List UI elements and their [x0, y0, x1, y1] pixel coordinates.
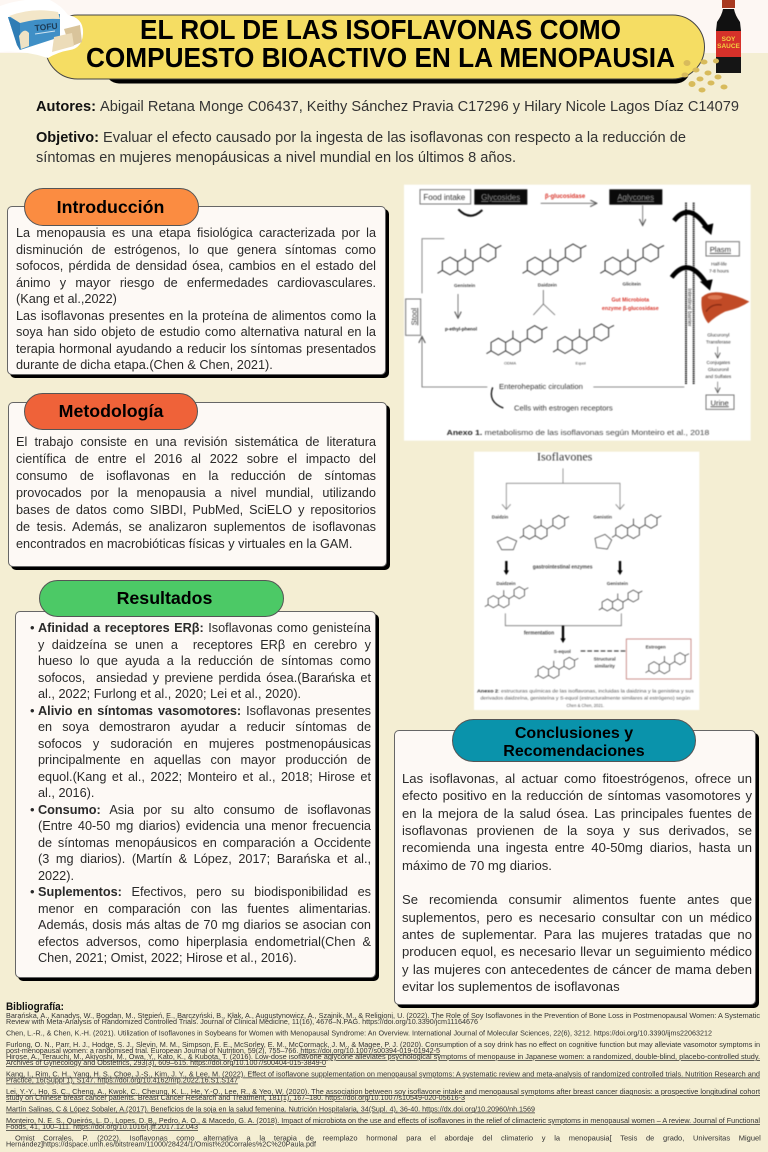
text: metodología: El trabajo consiste en una revisión sistemática de literatura — [16, 434, 376, 448]
molecules: enzyme β-glucosidase — [602, 306, 659, 312]
thick arrows — [672, 212, 713, 291]
reference list: Omist Corrales, P. (2022). Isoflavonas como alternativa a la terapia de reemplazo hormonal para el abordaje del climaterio y la menopausia[ Tesis de grado, Universitas Miguel — [15, 1134, 761, 1142]
top row: food intake and glycosides — [420, 189, 527, 216]
daidzin and genistin — [492, 514, 661, 550]
text: introducción: (Kang et al.,2022) — [16, 292, 117, 306]
authors: Autores: — [36, 98, 96, 115]
icon: soy sauce bottle — [716, 0, 741, 73]
text: conclusiones — [402, 771, 752, 994]
reference list: Kang, I., Rim, C. H., Yang, H. S., Choe, J.-S., Kim, J. Y., & Lee, M. (2022). Effect of isoflavone supplementation on menopausal symptoms: A systematic review and meta-analysis of randomized controlled trials. Nutrition Research and — [6, 1070, 760, 1078]
bibliography — [6, 1001, 761, 1148]
objective: Evaluar el efecto causado por la ingesta de las isoflavonas con respecto a la reducción de — [103, 129, 686, 146]
text: conclusiones: y las mujeres con antecedentes de cáncer de mama deben — [402, 962, 752, 977]
text: resultados list: Consumo: Asia por su alto consumo de isoflavonas — [38, 802, 371, 816]
daidzein and genistein: Genistein — [607, 581, 628, 586]
reference list: post-menopausal women: a randomised trial. European Journal of Nutrition, 59(2), 755–766. https://doi.org/10.1007/s00394-019-01942-5 — [6, 1046, 440, 1055]
text: resultados list: y daidzeína se unen a receptores ERβ en cerebro y — [38, 638, 371, 652]
figure: anexo 2 isoflavones structures — [474, 450, 700, 710]
header: title, decoration, authors and objective — [0, 0, 741, 166]
icon: liver — [701, 292, 749, 323]
reference list: Foods, 41, 100–111. https://doi.org/10.1016/j.jff.2017.12.043 — [6, 1122, 198, 1131]
text: resultados list: (Entre 40-50 mg diarios) evidencia una menor frecuencia — [38, 819, 371, 833]
heading: resultados: Resultados — [117, 588, 212, 608]
objective — [36, 129, 686, 166]
molecules: Equol — [576, 360, 586, 365]
daidzein and genistein — [485, 581, 642, 611]
title banner: COMPUESTO BIOACTIVO EN LA MENOPAUSIA — [86, 42, 675, 73]
liver pathway: and Sulfates — [705, 374, 732, 379]
heading: introducción: Introducción — [57, 196, 164, 216]
text: resultados list: Además, dosis más altas de 70 mg diarios se asocian con — [38, 918, 371, 932]
text: conclusiones: máximo de 70 mg diarios. — [402, 858, 552, 873]
enterohepatic circulation labels: Cells with estrogen receptors — [514, 404, 613, 413]
heading: metodología: Metodología — [59, 401, 163, 421]
panel: resultados — [15, 580, 379, 981]
molecules: ODMA — [504, 360, 516, 365]
text: metodología: encontrados en macrobióticas físicas y virtuales en la GAM. — [16, 537, 352, 551]
reference list: Chen, L.-R., & Chen, K.-H. (2021). Utilization of Isoflavones in Soybeans for Women with Menopausal Syndrome: An Overview. International Journal of Molecular Sciences, 22(6), 3212. https://doi.org/10.3390/ijms22063212 — [6, 1028, 712, 1038]
molecules: Glicitein — [622, 282, 641, 287]
text: conclusiones: producen equol, es necesario llevar un seguimiento médico — [402, 944, 752, 959]
reference list: study on Chinese breast cancer patients. Breast Cancer Research and Treatment, 181(1), 167–180. https://doi.org/10.1007/s10549-020-05616-3 — [6, 1093, 465, 1102]
objective: síntomas en mujeres menopáusicas a nivel mundial en los últimos 8 años. — [36, 149, 516, 166]
text: resultados list: hueso lo que ayuda a la reducción de síntomas como — [38, 654, 371, 668]
diagram heading: Isoflavones — [537, 450, 593, 464]
text: introducción — [16, 226, 376, 372]
aglycones box — [609, 189, 662, 225]
text: resultados list: Chen, 2021; Omist, 2022; Hirose et al., 2016). — [38, 951, 297, 965]
text: resultados list: menor en comparación con las fuentes alimentarias. — [38, 902, 371, 916]
liver pathway: Glucuronyl — [707, 333, 729, 338]
enzymes arrows: gastrointestinal enzymes — [533, 565, 593, 571]
reference list: Furlong, O. N., Parr, H. J., Hodge, S. J., Slevin, M. M., Simpson, E. E., McSorley, E. M., McCormack, J. M., & Magee, P. J. (2020). Consumption of a soy drink has no effect on cognitive function but may alleviate vasomotor symptoms in — [6, 1040, 760, 1049]
caption: anexo 2: Anexo 2 : estructuras químicas de las isoflavonas, incluidas la daidzina y la genistina y sus — [477, 689, 694, 694]
heading: conclusiones y recomendaciones — [452, 719, 696, 762]
plasm box — [706, 242, 739, 273]
text: metodología: provocados por la menopausia a nivel mundial, utilizando — [16, 486, 376, 500]
caption: anexo 2: derivados daidzeína, genisteína y S-equol (estructuralmente similares al estrógeno) según — [480, 696, 691, 701]
reference list: Archives of Gynecology and Obstetrics, 293(3), 609–615. https://doi.org/10.1007/s00404-015-3849-0 — [6, 1058, 326, 1067]
urine box: Urine — [711, 398, 729, 407]
reference list — [6, 1011, 761, 1148]
text: resultados list: de síntomas menopáusicos en comparación a Occidente — [38, 836, 371, 850]
panel: conclusiones y recomendaciones — [394, 719, 759, 1008]
daidzein and genistein: Daidzein — [496, 581, 516, 586]
plasm box: Plasm — [710, 245, 731, 254]
text: conclusiones: recomienda una ingesta entre 40-50mg diarios, hasta un — [402, 840, 752, 855]
aglycones box: Aglycones — [617, 193, 654, 202]
liver pathway: Transferase — [706, 340, 731, 345]
stool box and circulation path — [406, 239, 684, 387]
enterohepatic circulation labels — [491, 382, 613, 413]
text: introducción: disminución de estrógenos, lo que genera síntomas como — [16, 243, 376, 257]
urine box — [706, 395, 734, 409]
molecules: Genistein — [454, 283, 475, 288]
text: introducción: durante de dicha etapa.(Chen & Chen, 2021). — [16, 358, 273, 372]
panel: metodología — [8, 393, 390, 570]
text: conclusiones: antes de suplementar. Para las mujeres tratadas que no — [402, 927, 752, 942]
caption: anexo 2: Chen & Chen, 2021. — [566, 703, 604, 708]
text: resultados list: (3 mg diarios). (Martín & López, 2017; Barańska et al., — [38, 852, 371, 866]
molecules — [438, 244, 664, 365]
reference list: Hirose, A., Terauchi, M., Akiyoshi, M., Owa, Y., Kato, K., & Kubota, T. (2016). Low-dose isoflavone aglycone alleviates psychological symptoms of menopause in Japanese women: a randomized, double-blind, placebo-controlled study. — [6, 1052, 760, 1061]
panel: resultados: • — [30, 620, 35, 635]
estrogen box: Estrogen — [646, 645, 666, 650]
text: resultados list: principalmente en aquellas con mayor producción de — [38, 753, 371, 767]
plasm box: 7-8 hours — [709, 268, 730, 273]
fermentation bracket: fermentation — [524, 631, 554, 637]
caption: anexo 1: Anexo 1. metabolismo de las isoflavonas según Monteiro et al., 2018 — [447, 430, 709, 437]
heading: metodología — [24, 393, 198, 430]
text: conclusiones: suplementos, pero es necesario consultar con un médico — [402, 910, 752, 925]
text: resultados list: en soya demostraron ayudar a reducir síntomas de — [38, 720, 371, 734]
authors: Abigail Retana Monge C06437, Keithy Sánchez Pravia C17296 y Hilary Nicole Lagos Díaz C14079 — [100, 98, 739, 115]
text: resultados list: Suplementos: Efectivos, pero su biodisponibilidad es — [38, 885, 371, 899]
bibliography heading: Bibliografía: — [6, 1001, 64, 1013]
icon: soy sauce bottle: SAUCE — [717, 43, 741, 50]
text: resultados list: sofocos y sudoración en mujeres postmenopáusicas — [38, 736, 371, 750]
s-equol: similarity — [594, 664, 615, 669]
title banner — [46, 14, 704, 84]
intestinal barrier: Intestinal barrier — [686, 288, 692, 327]
top row: food intake and glycosides: Glycosides — [481, 193, 520, 202]
branching arrows — [502, 468, 624, 509]
icon: soybeans — [682, 58, 728, 92]
heading: conclusiones y recomendaciones: Recomendaciones — [503, 742, 645, 760]
panel: introducción — [7, 188, 389, 378]
text: resultados list: al., 2022; Furlong et al., 2020; Lei et al., 2020). — [38, 687, 301, 701]
text: metodología — [16, 434, 376, 551]
plasm box: Half-life — [711, 261, 727, 266]
stool box and circulation path: Stool — [409, 308, 418, 325]
text: conclusiones: efecto positivo en la reducción de síntomas vasomotores y — [402, 788, 752, 803]
reference list: Review with Meta-Analysis of Randomized Controlled Trials. Journal of Clinical Medicine, 11(16), 4676–N.PAG. https://doi.org/10.3390/jcm11164676 — [6, 1017, 478, 1026]
heading: resultados — [39, 580, 284, 617]
caption: anexo 2 — [477, 689, 694, 708]
title banner: EL ROL DE LAS ISOFLAVONAS COMO — [140, 14, 621, 45]
text: metodología: de tesis. Además, se analizaron suplementos de isoflavonas — [16, 520, 376, 534]
reference list: Hernández]https://dspace.umh.es/bitstream/11000/28424/1/Omist%20Corrales%2C%20Paula.pdf — [6, 1140, 317, 1148]
panel: resultados: • — [30, 884, 35, 899]
molecules: Gut Microbiota — [612, 298, 649, 304]
text: metodología: bases de datos como SIBDI, PubMed, SciELO y repositorios — [16, 503, 376, 517]
text: conclusiones: isoflavonas provienen de la soya y sus derivados, se — [402, 823, 752, 838]
estrogen box — [626, 639, 691, 679]
icon: soy sauce bottle: SOY — [722, 36, 736, 43]
text: conclusiones: evitar los suplementos de isoflavonas — [402, 979, 620, 994]
text: introducción: La menopausia es una etapa fisiológica caracterizada por la — [16, 226, 376, 240]
fermentation bracket — [505, 613, 621, 643]
text: resultados list: Afinidad a receptores ERβ: Isoflavonas como genisteína — [38, 621, 371, 635]
text: introducción: sofocos, pérdida de densidad ósea, cambios en el estado del — [16, 259, 376, 273]
text: conclusiones: Se recomienda consumir alimentos fuente antes que — [402, 892, 752, 907]
text: metodología: científica de entre el 2016 al 2022 sobre el impacto del — [16, 452, 376, 466]
text: introducción: Las isoflavonas presentes en la proteína de alimentos como la — [16, 309, 376, 323]
s-equol: S-equol — [554, 649, 571, 654]
text: resultados list — [30, 620, 371, 965]
heading: introducción — [24, 188, 199, 226]
molecules: p-ethyl-phenol — [445, 327, 477, 332]
liver pathway — [705, 333, 732, 392]
reference list: Practice, 16(Suppl 1), S147. https://doi.org/10.4162/nrp.2022.16.S1.S147 — [6, 1076, 238, 1084]
reference list: Martín Salinas, C & López Sobaler, A.(2017). Beneficios de la soja en la salud femenina. Nutrición Hospitalaria, 34(Supl. 4), 36-40. https://dx.doi.org/10.20960/nh.1569 — [6, 1104, 535, 1114]
enzyme arrow — [541, 194, 596, 203]
enzyme arrow: β-glucosidase — [545, 194, 586, 200]
enterohepatic circulation labels: Enterohepatic circulation — [499, 382, 583, 391]
s-equol — [535, 649, 626, 678]
text: introducción: soya han sido objeto de estudio como alternativa natural en la — [16, 325, 376, 339]
objective: Objetivo: — [36, 129, 99, 146]
s-equol: Structural — [594, 656, 616, 661]
text: resultados list: sofocos, ansiedad y previene perdida ósea.(Barańska et — [38, 670, 371, 684]
icon: tofu package: TOFU — [34, 21, 58, 33]
molecules: Daidzein — [538, 282, 557, 287]
figure: anexo 1 metabolism diagram — [404, 184, 751, 441]
text: introducción: terapia hormonal ayudando a reducir los síntomas presentados — [16, 342, 376, 356]
text: metodología: consumo de isoflavonas en la reducción de síntomas — [16, 469, 376, 483]
liver pathway: Glucuronil — [708, 367, 729, 372]
panel: resultados: • — [30, 702, 35, 718]
text: conclusiones: en la mejora de la salud ósea. Las principales fuentes de — [402, 806, 752, 821]
text: resultados list: al., 2016). — [38, 786, 94, 800]
enzymes arrows — [504, 561, 623, 575]
heading: conclusiones y recomendaciones: Conclusiones y — [515, 725, 633, 742]
text: introducción: ánimo y mayor riesgo de enfermedades cardiovasculares. — [16, 276, 376, 290]
liver pathway: Conjugates — [707, 360, 731, 365]
icon: tofu package — [0, 0, 83, 58]
daidzin and genistin: Daidzin — [492, 514, 508, 519]
panel: resultados: • — [30, 802, 35, 816]
text: resultados list: efectos adversos, como hiperplasia endometrial(Chen & — [38, 934, 371, 948]
reference list: Barańska, A., Kanadys, W., Bogdan, M., Stępień, E., Barczyński, B., Kłak, A., Augustynowicz, A., Szajnik, M., & Religioni, U. (2022). The Role of Soy Isoflavones in the Prevention of Bone Loss in Postmenopausal Women: A Systematic — [6, 1011, 760, 1020]
text: conclusiones: Las isoflavonas, al actuar como fitoestrógenos, ofrece un — [402, 771, 752, 786]
reference list: Lei, Y.-Y., Ho, S. C., Cheng, A., Kwok, C., Cheung, K. L., He, Y.-Q., Lee, R., & Yeo, W. (2020). The association between soy isoflavone intake and menopausal symptoms after breast cancer diagnosis: a prospective longitudinal cohort — [6, 1087, 761, 1096]
top row: food intake and glycosides: Food intake — [423, 193, 466, 202]
intestinal barrier — [686, 203, 694, 384]
text: resultados list: equol.(Kang et al., 2022; Monteiro et al., 2018; Hirose et — [38, 770, 371, 784]
daidzin and genistin: Genistin — [593, 514, 612, 519]
text: resultados list: Alivio en síntomas vasomotores: Isoflavonas presentes — [38, 704, 371, 718]
text: resultados list: 2022). — [38, 868, 74, 882]
